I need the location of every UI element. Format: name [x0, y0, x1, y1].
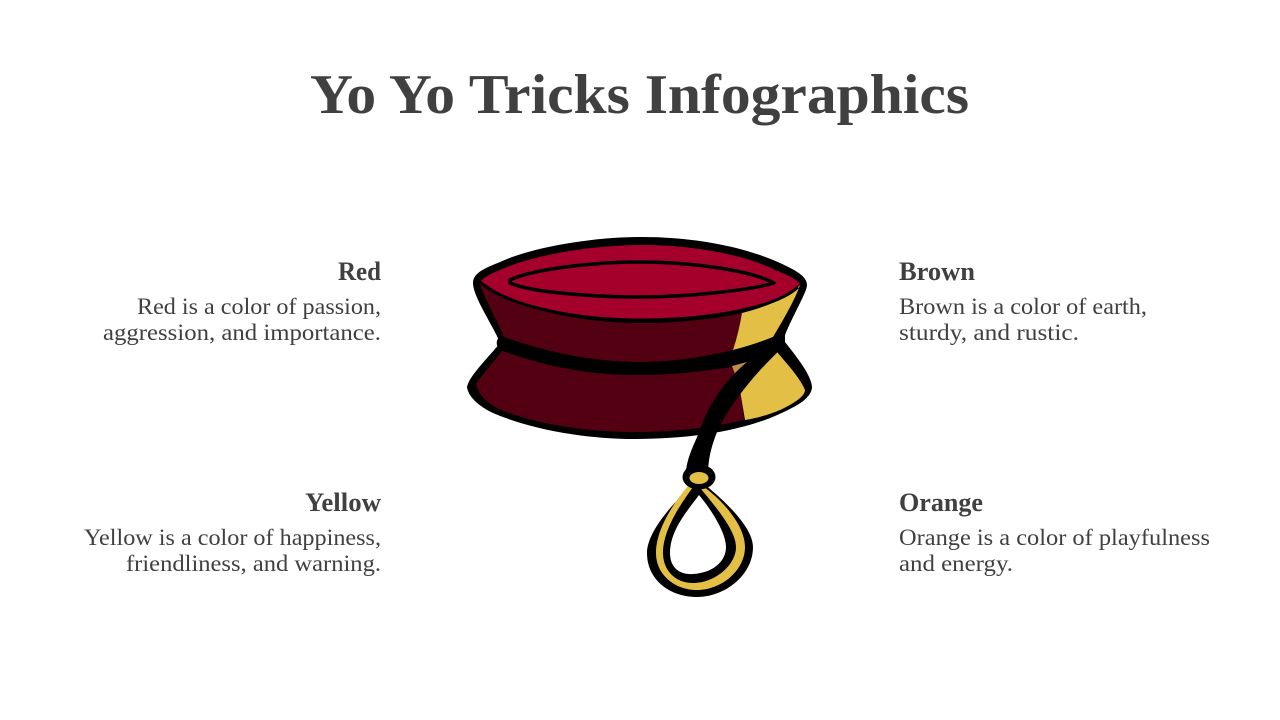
heading: brown: Brown: [899, 257, 976, 286]
waist band: [497, 336, 785, 375]
text: yellow description: [84, 525, 381, 576]
accent: tan patch: [732, 362, 747, 374]
heading: yellow: Yellow: [305, 488, 381, 517]
lower body: maroon: [476, 350, 744, 432]
panel: red: [103, 257, 382, 345]
text: brown description: sturdy, and rustic.: [899, 320, 1079, 345]
text: red description: [103, 294, 381, 345]
heading: red: Red: [338, 257, 382, 286]
upper body: yellow: [733, 285, 800, 350]
string: [686, 340, 782, 470]
text: yellow description: Yellow is a color of happiness,: [84, 525, 381, 550]
lower body: yellow: [740, 352, 805, 420]
loop: yellow cord: [656, 486, 745, 590]
icon: yo-yo: [467, 237, 812, 597]
top face: [481, 245, 800, 319]
text: brown description: [899, 294, 1147, 345]
text: orange description: [899, 525, 1210, 576]
rim line: [484, 285, 798, 320]
upper body: maroon: [480, 284, 742, 362]
text: yellow description: friendliness, and warning.: [126, 551, 381, 576]
heading: orange: Orange: [899, 488, 983, 517]
knot: [690, 472, 708, 484]
loop outline: [647, 480, 753, 597]
inner lens line: [510, 262, 774, 297]
text: red description: aggression, and importance.: [103, 320, 381, 345]
panel: brown: [899, 257, 1147, 345]
text: orange description: Orange is a color of playfulness: [899, 525, 1210, 550]
knot outline: [682, 464, 716, 490]
yo-yo outline: [467, 237, 812, 439]
panel: yellow: [84, 488, 381, 576]
text: orange description: and energy.: [899, 551, 1013, 576]
text: red description: Red is a color of passion,: [137, 294, 381, 319]
panel: orange: [899, 488, 1210, 576]
text: brown description: Brown is a color of earth,: [899, 294, 1147, 319]
title: Yo Yo Tricks Infographics: [310, 64, 969, 126]
